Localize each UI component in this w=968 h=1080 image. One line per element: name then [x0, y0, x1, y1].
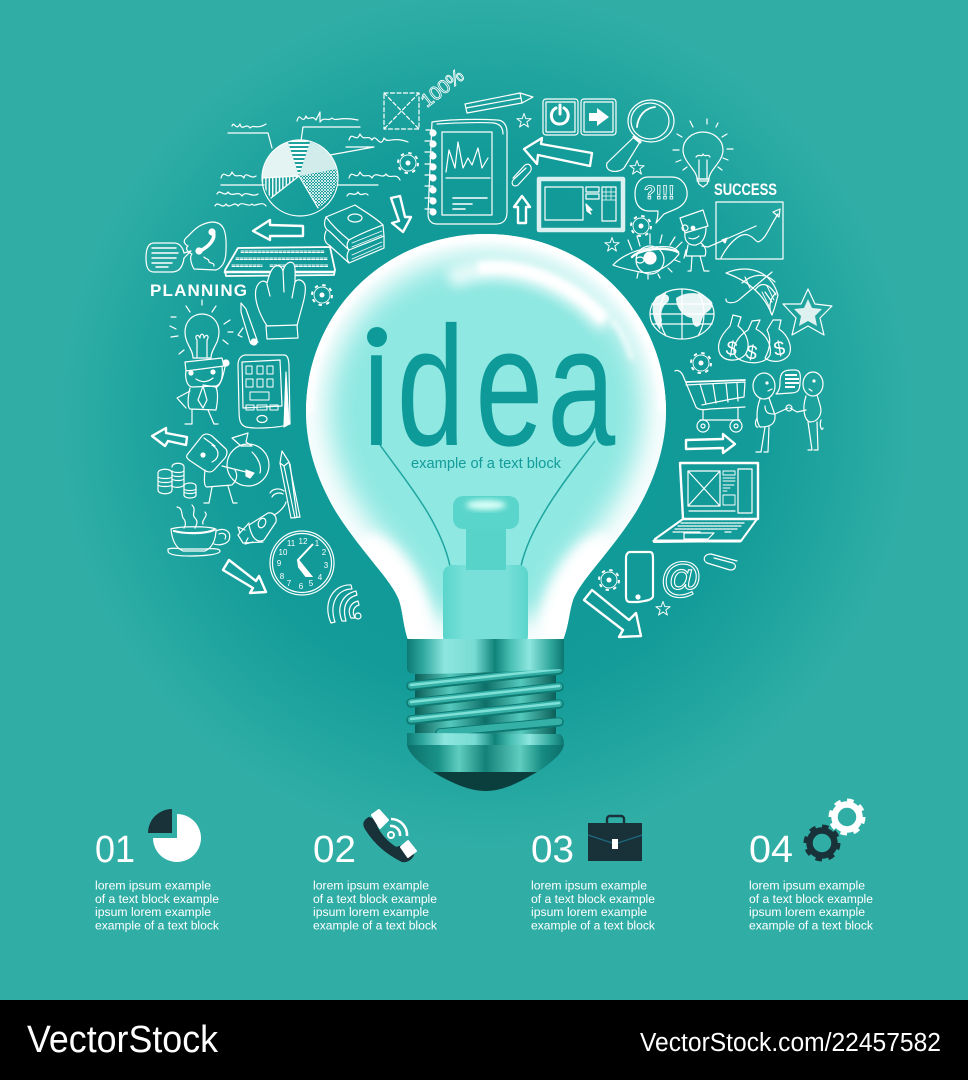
inner stem [443, 496, 528, 645]
number 01: 01 [95, 829, 135, 871]
icon: notebook with chart [425, 119, 507, 224]
text block 02: ipsum lorem example [313, 905, 429, 919]
panel: step 02 [313, 810, 438, 932]
icon: bent arrow left [152, 428, 187, 446]
icon: paper clip [704, 554, 737, 570]
icon: left arrow [253, 220, 303, 240]
icon: up arrow [514, 196, 530, 223]
icon: right arrow [686, 434, 735, 453]
icon: telephone [364, 810, 416, 861]
icon: clock: 9 [277, 559, 282, 568]
text block 03: example of a text block [531, 918, 656, 932]
doodles around the bulb [146, 65, 832, 637]
label: success: SUCCESS [714, 180, 777, 199]
text block 02: lorem ipsum example [313, 878, 429, 892]
icon: clock: 7 [287, 579, 292, 588]
icon: gear [631, 216, 651, 236]
icon: idea bulb [673, 119, 733, 187]
number 02: 02 [313, 829, 356, 871]
icon: arrow down [391, 196, 411, 232]
icon: star large [783, 289, 832, 335]
icon: briefcase [588, 816, 642, 861]
icon: clock [270, 531, 334, 595]
panel: step 03 [531, 816, 656, 932]
text block 03: ipsum lorem example [531, 905, 647, 919]
panel: step 01 [95, 809, 220, 932]
icon: gears [806, 800, 864, 860]
label: planning: PLANNING [150, 281, 248, 300]
number 03: 03 [531, 829, 574, 871]
icon: businessman with bulb [177, 358, 229, 424]
text block 02 [313, 878, 438, 932]
icon: tall pencil [270, 451, 300, 518]
icon: big arrow south-east [584, 590, 641, 637]
text block 04 [749, 878, 874, 932]
icon: money bags [719, 315, 790, 363]
icon: clock: 11 [287, 539, 296, 548]
footer url: VectorStock.com/22457582 [640, 1029, 941, 1057]
icon: stack of books [325, 205, 384, 263]
icon: coins [158, 463, 196, 498]
icon: clock: 4 [318, 573, 323, 582]
icon: shopping cart [675, 370, 745, 432]
title: idea: idea [363, 292, 616, 482]
icon: star [656, 602, 670, 615]
dollar signs on bags: $ [744, 341, 759, 365]
icon: laptop [654, 463, 758, 542]
text block 01: of a text block example [95, 892, 219, 906]
icon: paper clip [512, 164, 531, 186]
bulb subtitle: example of a text block [411, 456, 562, 472]
light bulb [300, 230, 672, 791]
icon: clock: 3 [324, 561, 329, 570]
icon: keyboard [225, 247, 335, 276]
footer logo: VectorStock [27, 1019, 219, 1061]
text block 02: of a text block example [313, 892, 437, 906]
icon: pencil [465, 93, 533, 113]
icon: bulb with rays [170, 300, 233, 358]
icon: power button box [543, 99, 578, 135]
icon: browser window [539, 179, 623, 230]
icon: success chart [716, 202, 783, 259]
text block 04: of a text block example [749, 892, 873, 906]
icon: hand [255, 262, 305, 339]
icon: gear [691, 353, 711, 373]
icon: clock: 2 [322, 548, 327, 557]
icon: coffee cup [168, 505, 230, 556]
icon: clock: 5 [309, 579, 314, 588]
icon: dashed box [384, 93, 419, 129]
text block 01: ipsum lorem example [95, 905, 211, 919]
text block 03: lorem ipsum example [531, 878, 647, 892]
icon: clock: 8 [280, 572, 285, 581]
icon: arrow south-east [223, 560, 266, 593]
icon: arrow box [581, 99, 616, 135]
icon: clock: 6 [299, 582, 304, 591]
icon: gear [599, 570, 619, 590]
text block 04: lorem ipsum example [749, 878, 865, 892]
icon: small pencil [238, 303, 258, 345]
icon: star [605, 238, 619, 251]
icon: smart phone [626, 552, 653, 602]
icon: pie chart sketch [215, 112, 408, 216]
icon: big left arrow [524, 138, 592, 166]
icon: man carrying bag [187, 433, 269, 503]
text block 03 [531, 878, 656, 932]
text block 03: of a text block example [531, 892, 655, 906]
text block 04: example of a text block [749, 918, 874, 932]
panel: step 04 [749, 800, 874, 932]
bulb glass [300, 230, 672, 657]
icon: speech bubble [146, 243, 191, 272]
icon: at sign: @ [660, 554, 703, 601]
icon: magnifier [607, 100, 674, 171]
icon: clock: 10 [279, 548, 288, 557]
dollar signs on bags: $ [724, 337, 739, 361]
icon: gear [312, 285, 332, 305]
text block 04: ipsum lorem example [749, 905, 865, 919]
icon: clock: 1 [315, 539, 320, 548]
screw base [407, 639, 564, 791]
footer bar [0, 1000, 968, 1080]
icon: star [630, 160, 644, 174]
icon: head with telephone [184, 222, 226, 270]
icon: right arrow in box [589, 108, 609, 126]
icon: gear [398, 153, 418, 173]
icon: pie chart [148, 809, 201, 862]
label: 100%: 100% [417, 65, 468, 112]
icon: star [517, 114, 531, 127]
pie chart labels [215, 112, 408, 206]
icon: presenter man [680, 210, 756, 271]
text block 02: example of a text block [313, 918, 438, 932]
icon: question speech bubble [635, 177, 687, 223]
text block 01 [95, 878, 220, 932]
icon: globe [650, 289, 714, 339]
icon: two men shaking hands [753, 370, 823, 452]
title: idea [367, 322, 616, 447]
icon: wifi [328, 585, 361, 623]
icon: umbrella [726, 269, 778, 315]
icon: plug [238, 502, 286, 544]
filament wires [380, 441, 595, 566]
dollar signs on bags [724, 337, 787, 365]
icon: clock: 12 [299, 537, 308, 546]
number 04: 04 [749, 829, 793, 871]
text block 01: lorem ipsum example [95, 878, 211, 892]
text block 01: example of a text block [95, 918, 220, 932]
icon: tablet [238, 355, 290, 428]
icon: question speech bubble: ?!!! [644, 183, 675, 204]
dollar signs on bags: $ [772, 337, 787, 361]
icon: eye [613, 234, 682, 279]
